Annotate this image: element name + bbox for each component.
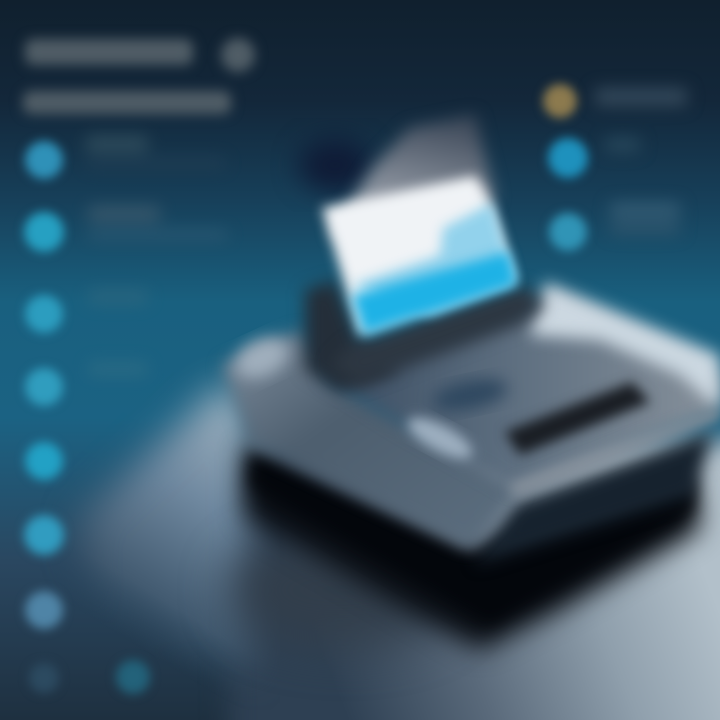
base shadow (245, 450, 700, 650)
device: screen and stand (299, 115, 545, 392)
control recess (430, 373, 510, 417)
base front edge highlight (510, 408, 720, 496)
stand (305, 280, 400, 392)
left feature list (24, 136, 228, 694)
title (23, 38, 255, 114)
base top surface (320, 295, 720, 490)
screen light blue panel (352, 203, 516, 315)
paper slot (505, 382, 650, 455)
base right side wall (475, 432, 712, 565)
screen bezel (330, 285, 545, 385)
right list icons (548, 138, 588, 251)
icon: gold circle (543, 84, 577, 118)
device: scanner base (222, 282, 720, 650)
dark shadow behind screen (299, 139, 371, 191)
right list captions (595, 88, 687, 234)
base dark underside (250, 450, 695, 625)
left corner highlight (229, 330, 295, 386)
base back highlight (530, 282, 720, 410)
list item icons (24, 141, 150, 694)
right feature list (543, 84, 687, 251)
screen blue band (352, 252, 516, 334)
floor surface (71, 367, 720, 720)
base front-left face (222, 330, 520, 548)
list item captions (86, 136, 228, 376)
button highlight (402, 410, 478, 466)
screen white area (322, 176, 515, 335)
screen upper grey (330, 115, 495, 235)
